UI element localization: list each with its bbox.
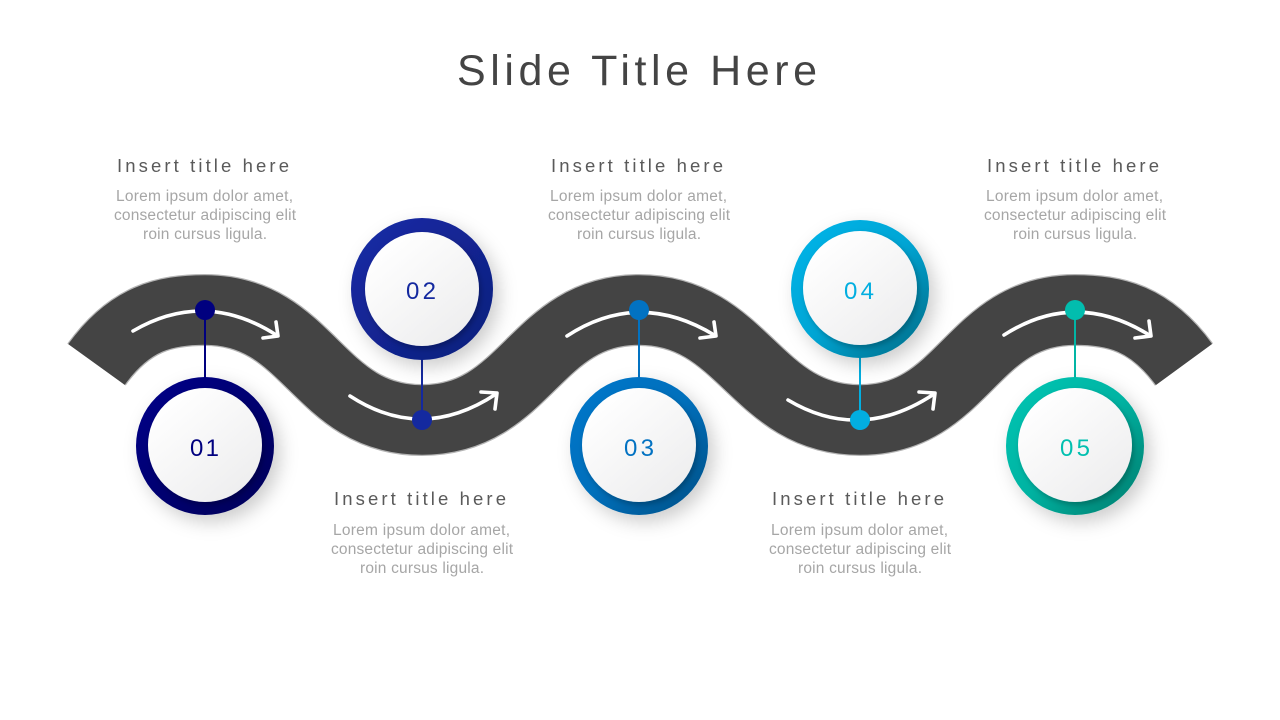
text block 04: roin cursus ligula. (798, 560, 922, 577)
text block 05: Lorem ipsum dolor amet, (986, 188, 1163, 205)
text block 02 (331, 488, 514, 577)
badge 01 (136, 377, 274, 515)
text block 02: consectetur adipiscing elit (331, 541, 514, 558)
text block 05: Insert title here (987, 155, 1159, 176)
marker 04 (791, 220, 929, 430)
arrow 4 (788, 392, 935, 420)
badge 03: 03 (624, 435, 654, 462)
road (96, 310, 1184, 420)
badge 03 (570, 377, 708, 515)
text block 04: Insert title here (772, 488, 944, 509)
badge 04: 04 (844, 278, 874, 305)
arrow 1 (133, 311, 278, 338)
text block 05: consectetur adipiscing elit (984, 207, 1167, 224)
text block 04: Lorem ipsum dolor amet, (771, 522, 948, 539)
badge 05: 05 (1060, 435, 1090, 462)
text block 02: roin cursus ligula. (360, 560, 484, 577)
text block 01: Lorem ipsum dolor amet, (116, 188, 293, 205)
badge 04 (791, 220, 929, 358)
badge 02 (351, 218, 493, 360)
text block 03: Insert title here (551, 155, 723, 176)
text block 05 (984, 155, 1167, 243)
arrow 3 (567, 312, 716, 338)
text block 02: Insert title here (334, 488, 506, 509)
text block 01 (114, 155, 297, 243)
badge 01: 01 (190, 435, 219, 462)
marker 02 (351, 218, 493, 430)
text block 01: consectetur adipiscing elit (114, 207, 297, 224)
title: Slide Title Here (457, 47, 817, 95)
text block 04: consectetur adipiscing elit (769, 541, 952, 558)
marker 05 (1006, 300, 1144, 515)
badge 02: 02 (406, 278, 436, 305)
text block 04 (769, 488, 952, 577)
marker 03 (570, 300, 708, 515)
text block 02: Lorem ipsum dolor amet, (333, 522, 510, 539)
arrow 2 (350, 392, 497, 419)
badge 05 (1006, 377, 1144, 515)
text block 01: Insert title here (117, 155, 289, 176)
text block 03: consectetur adipiscing elit (548, 207, 731, 224)
text block 05: roin cursus ligula. (1013, 226, 1137, 243)
arrow 5 (1004, 312, 1151, 338)
marker 01 (136, 300, 274, 515)
text block 03 (548, 155, 731, 243)
text block 03: Lorem ipsum dolor amet, (550, 188, 727, 205)
text block 01: roin cursus ligula. (143, 226, 267, 243)
text block 03: roin cursus ligula. (577, 226, 701, 243)
